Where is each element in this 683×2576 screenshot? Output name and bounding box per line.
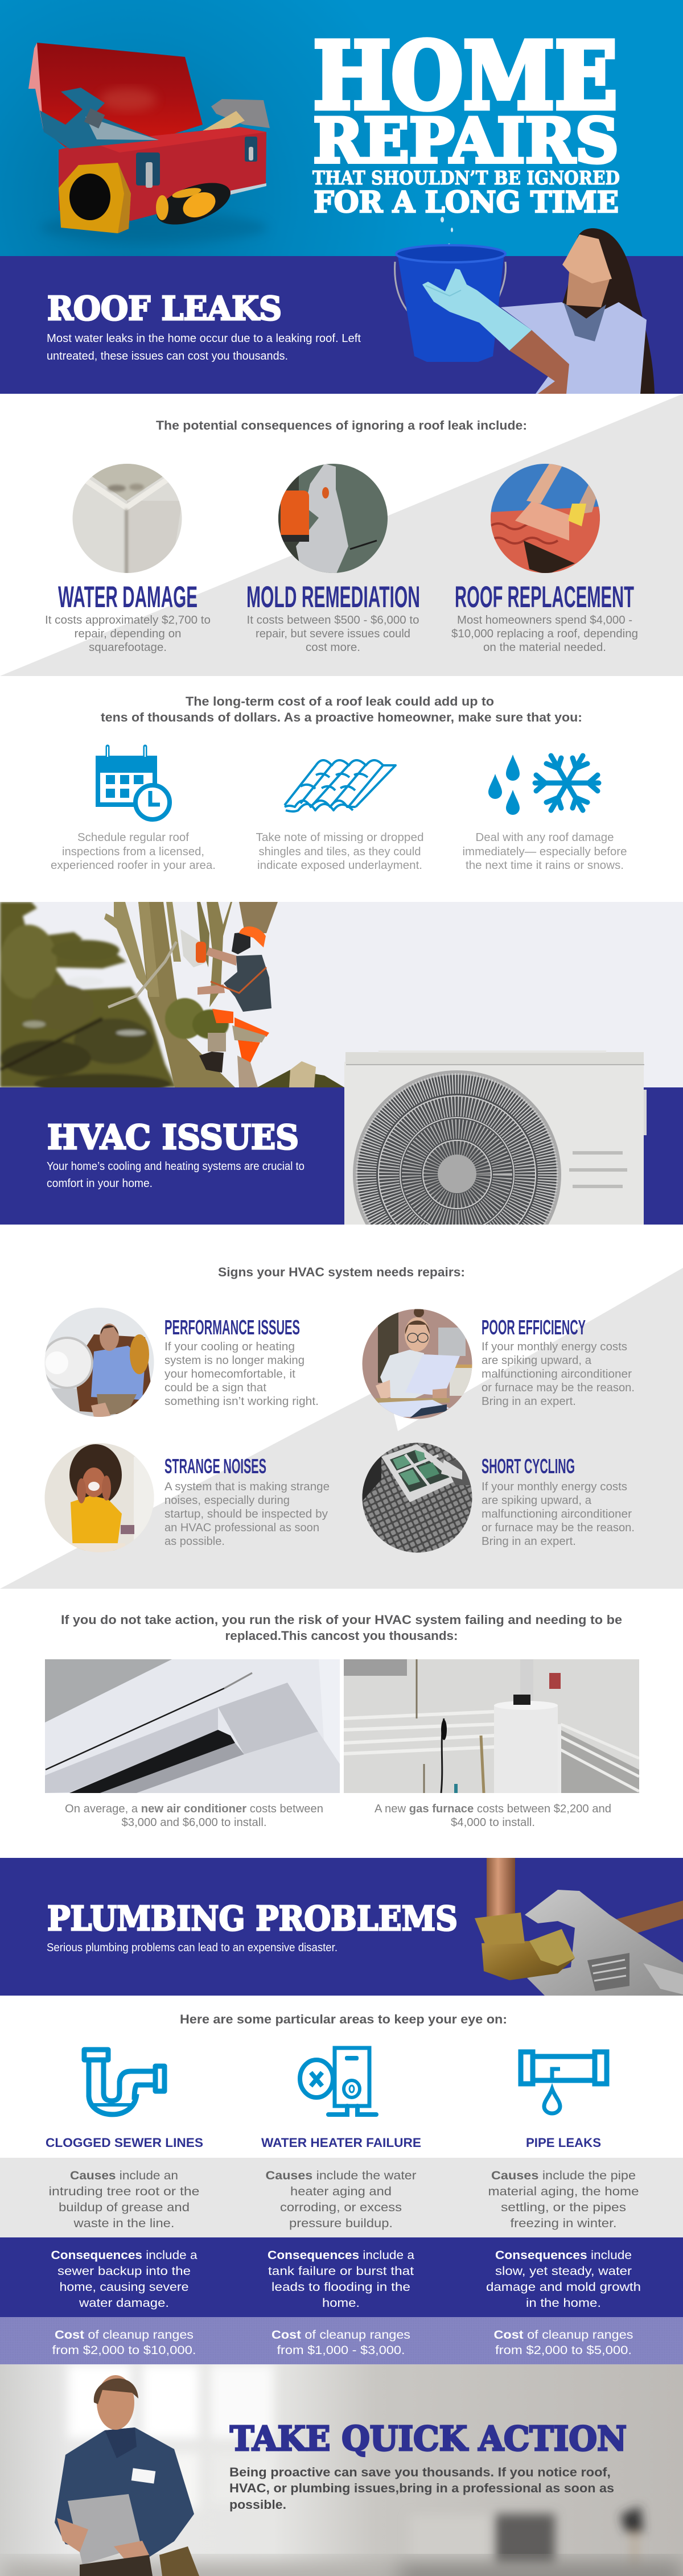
photo: blurred living room with handyman	[0, 2364, 683, 2576]
card: strange noises: noises, especially during	[164, 1494, 290, 1507]
photo: dirty air filter	[361, 1442, 473, 1555]
card: roof replacement	[451, 580, 638, 654]
icon: water heater failure	[300, 2048, 376, 2115]
text: pipe causes: freezing in winter.	[510, 2217, 617, 2230]
panel: proactive tips	[51, 694, 627, 872]
text: pipe consequences: in the home.	[526, 2297, 601, 2310]
text: pipe causes: Causes include the pipe	[491, 2169, 636, 2182]
card: performance issues: PERFORMANCE ISSUES	[164, 1316, 300, 1339]
text: sewer cost: Cost of cleanup ranges	[55, 2328, 194, 2342]
text: roof leaks intro: untreated, these issues can cost you thousands.	[47, 350, 288, 362]
text: heater consequences: leads to flooding in the	[271, 2281, 410, 2294]
text: take quick action body: Being proactive can save you thousands. If you notice roof,	[229, 2465, 611, 2479]
photo: arborist cutting tree	[0, 902, 344, 1094]
card: mold remediation: It costs between $500 - $6,000 to	[247, 614, 419, 627]
card: short cycling: Bring in an expert.	[482, 1535, 576, 1548]
card: strange noises: as possible.	[164, 1535, 225, 1548]
card: roof replacement: Most homeowners spend $4,000 -	[457, 614, 632, 627]
text: pipe causes: settling, or the pipes	[501, 2201, 626, 2214]
card: water damage: WATER DAMAGE	[58, 580, 198, 614]
text: sewer causes: buildup of grease and	[59, 2201, 190, 2214]
text: pipe cost: from $2,000 to $5,000.	[495, 2344, 632, 2357]
text: pipe cost	[494, 2328, 633, 2357]
card: roof replacement: on the material needed.	[483, 641, 606, 654]
card: poor efficiency: are spiking upward, a	[482, 1354, 592, 1367]
icon: rain drops and snowflake	[488, 755, 599, 815]
text: pipe causes	[488, 2169, 639, 2230]
card: performance issues: your homecomfortable, it	[164, 1368, 295, 1380]
label: pipe leaks: PIPE LEAKS	[526, 2136, 601, 2150]
card: short cycling	[482, 1454, 635, 1548]
photo: man sweating with fan	[42, 1308, 155, 1417]
icon: calendar and clock	[96, 747, 170, 819]
heading: take quick action: TAKE QUICK ACTION	[230, 2419, 627, 2458]
heading: long-term cost: tens of thousands of dollars. As a proactive homeowner, make sure that you:	[101, 710, 582, 724]
text: hvac intro: comfort in your home.	[47, 1177, 153, 1190]
card: mold remediation: repair, but severe issues could	[256, 628, 410, 640]
text: hvac intro	[47, 1160, 305, 1190]
heading: hvac issues: HVAC ISSUES	[47, 1118, 299, 1157]
text: heater consequences: tank failure or burst that	[268, 2265, 414, 2278]
heading: signs hvac needs repairs: Signs your HVAC system needs repairs:	[218, 1265, 465, 1279]
text: sewer cost	[52, 2328, 196, 2357]
text: take quick action body	[229, 2465, 614, 2512]
photo: mold remediation worker	[276, 461, 390, 575]
text: heater causes: heater aging and	[290, 2185, 392, 2198]
photo: wall air conditioner	[45, 1659, 340, 1793]
card: short cycling: SHORT CYCLING	[482, 1454, 575, 1478]
text: schedule inspections: Schedule regular roof	[77, 831, 189, 844]
text: roof leaks intro: Most water leaks in the home occur due to a leaking roof. Left	[47, 332, 361, 345]
text: roof leaks intro	[47, 332, 361, 362]
text: note missing shingles: shingles and tiles, as they could	[258, 846, 421, 858]
text: heater cost	[271, 2328, 410, 2357]
photo: water damage ceiling corner	[73, 464, 182, 573]
photo: woman reading bill	[361, 1307, 473, 1420]
card: performance issues: If your cooling or heating	[164, 1341, 295, 1353]
text: take quick action body: possible.	[229, 2497, 286, 2512]
text: pipe consequences: Consequences include	[495, 2249, 632, 2262]
panel: cost row	[0, 2317, 683, 2364]
card: performance issues: something isn’t working right.	[164, 1395, 319, 1408]
text: sewer consequences: water damage.	[79, 2297, 169, 2310]
icon: leaking pipe	[521, 2052, 607, 2113]
card: mold remediation	[246, 580, 420, 654]
heading: long-term cost	[101, 694, 582, 724]
panel: replacement costs	[45, 1613, 639, 1829]
card: mold remediation: MOLD REMEDIATION	[246, 580, 420, 614]
text: heater cost: Cost of cleanup ranges	[271, 2328, 410, 2342]
text: deal with damage	[462, 831, 627, 872]
card: performance issues: system is no longer making	[164, 1354, 305, 1367]
text: heater consequences: Consequences include a	[268, 2249, 414, 2262]
card: performance issues	[164, 1316, 319, 1408]
text: heater consequences: home.	[322, 2297, 360, 2310]
text: heater cost: from $1,000 - $3,000.	[277, 2344, 405, 2357]
card: poor efficiency: POOR EFFICIENCY	[482, 1316, 586, 1339]
text: sewer cost: from $2,000 to $10,000.	[52, 2344, 196, 2357]
text: take quick action body: HVAC, or plumbing issues,bring in a professional as soon as	[229, 2481, 614, 2495]
heading: risk of failing: If you do not take action, you run the risk of your HVAC system failing and needing to be	[61, 1613, 622, 1627]
text: heater causes: Causes include the water	[265, 2169, 417, 2182]
text: deal with damage: Deal with any roof damage	[476, 831, 614, 844]
caption: new gas furnace: A new gas furnace costs between $2,200 and	[375, 1803, 611, 1815]
text: note missing shingles	[256, 831, 423, 872]
photo: woman covering ears	[44, 1443, 157, 1553]
card: poor efficiency: malfunctioning airconditioner	[482, 1368, 632, 1380]
text: heater causes: corroding, or excess	[280, 2201, 402, 2214]
heading: roof leaks: ROOF LEAKS	[47, 290, 282, 328]
heading: plumbing problems: PLUMBING PROBLEMS	[47, 1899, 458, 1938]
text: plumbing intro: Serious plumbing problems can lead to an expensive disaster.	[47, 1942, 338, 1954]
text: sewer consequences: Consequences include a	[51, 2249, 198, 2262]
text: schedule inspections: experienced roofer in your area.	[51, 859, 216, 872]
text: sewer causes: waste in the line.	[73, 2217, 174, 2230]
card: strange noises: an HVAC professional as soon	[164, 1522, 319, 1534]
text: sewer consequences	[51, 2249, 198, 2310]
card: short cycling: If your monthly energy costs	[482, 1481, 627, 1493]
text: heater causes	[265, 2169, 417, 2230]
photo: gas furnace and water heater	[344, 1659, 639, 1793]
card: short cycling: or furnace may be the reason.	[482, 1522, 635, 1534]
card: strange noises: A system that is making strange	[164, 1481, 330, 1493]
panel: consequences row	[0, 2237, 683, 2317]
title: home repairs: HOME	[313, 22, 618, 130]
card: short cycling: are spiking upward, a	[482, 1494, 592, 1507]
panel: roof consequences	[0, 394, 683, 676]
text: pipe consequences: slow, yet steady, water	[495, 2265, 632, 2278]
photo: roof replacement hands and tiles	[491, 464, 600, 573]
diagonal grey background	[0, 394, 683, 676]
text: deal with damage: immediately— especially before	[462, 846, 627, 858]
text: note missing shingles: indicate exposed underlayment.	[257, 859, 422, 872]
card: performance issues: could be a sign that	[164, 1382, 266, 1394]
panel: hvac signs	[0, 1265, 683, 1589]
card: water damage: It costs approximately $2,700 to	[45, 614, 211, 627]
card: strange noises: startup, should be inspected by	[164, 1508, 328, 1520]
text: pipe consequences	[486, 2249, 641, 2310]
panel: roof leaks banner	[0, 217, 683, 394]
card: strange noises	[164, 1454, 330, 1548]
card: poor efficiency: If your monthly energy costs	[482, 1341, 627, 1353]
title: home repairs: REPAIRS	[313, 105, 619, 177]
text: heater consequences	[268, 2249, 414, 2310]
text: sewer consequences: home, causing severe	[59, 2281, 189, 2294]
card: water damage	[45, 580, 211, 654]
panel: causes row	[0, 2158, 683, 2237]
icon: red toolbox with tools	[28, 43, 270, 242]
text: sewer causes: intruding tree root or the	[49, 2185, 199, 2198]
caption: new gas furnace: $4,000 to install.	[451, 1816, 535, 1829]
photo: wrench on copper pipe	[475, 1858, 683, 1996]
icon: clogged drain trap	[84, 2050, 164, 2115]
caption: new air conditioner: $3,000 and $6,000 to install.	[122, 1816, 266, 1829]
card: water damage: repair, depending on	[74, 628, 181, 640]
label: water heater failure: WATER HEATER FAILURE	[261, 2136, 421, 2150]
text: schedule inspections: inspections from a licensed,	[62, 846, 204, 858]
card: poor efficiency: or furnace may be the reason.	[482, 1382, 635, 1394]
title: home repairs: THAT SHOULDN’T BE IGNORED	[312, 167, 620, 189]
text: schedule inspections	[51, 831, 216, 872]
card: strange noises: STRANGE NOISES	[164, 1454, 266, 1478]
text: sewer consequences: sewer backup into the	[57, 2265, 191, 2278]
card: poor efficiency	[482, 1316, 635, 1408]
caption: new air conditioner: On average, a new air conditioner costs between	[65, 1803, 323, 1815]
card: short cycling: malfunctioning airconditioner	[482, 1508, 632, 1520]
card: water damage: squarefootage.	[89, 641, 167, 654]
icon: roof tiles	[285, 760, 396, 811]
text: note missing shingles: Take note of missing or dropped	[256, 831, 423, 844]
panel: take quick action	[0, 2364, 683, 2576]
heading: potential consequences: The potential consequences of ignoring a roof leak include:	[156, 418, 527, 432]
card: poor efficiency: Bring in an expert.	[482, 1395, 576, 1408]
title: home repairs	[312, 22, 620, 220]
heading: risk of failing	[61, 1613, 622, 1643]
panel: plumbing problem areas	[46, 2012, 607, 2150]
caption: new gas furnace	[375, 1803, 611, 1829]
card: roof replacement: $10,000 replacing a roof, depending	[451, 628, 638, 640]
title: home repairs: FOR A LONG TIME	[314, 186, 619, 220]
text: pipe causes: material aging, the home	[488, 2185, 639, 2198]
heading: areas to keep eye on: Here are some particular areas to keep your eye on:	[180, 2012, 507, 2026]
heading: long-term cost: The long-term cost of a roof leak could add up to	[186, 694, 494, 708]
text: hvac intro: Your home’s cooling and heating systems are crucial to	[47, 1160, 305, 1173]
text: sewer causes	[49, 2169, 199, 2230]
icon: woman holding blue bucket catching drips	[395, 217, 655, 394]
panel: hvac banner	[0, 902, 683, 1225]
text: pipe consequences: damage and mold growth	[486, 2281, 641, 2294]
text: sewer causes: Causes include an	[70, 2169, 178, 2182]
text: deal with damage: the next time it rains or snows.	[466, 859, 624, 872]
heading: risk of failing: replaced.This cancost you thousands:	[225, 1629, 458, 1643]
panel: hero header	[0, 0, 683, 256]
diagonal grey background	[0, 1268, 683, 1589]
panel: plumbing banner	[0, 1858, 683, 1996]
photo: outdoor air conditioner unit	[344, 1050, 647, 1225]
label: clogged sewer lines: CLOGGED SEWER LINES	[46, 2136, 203, 2150]
caption: new air conditioner	[65, 1803, 323, 1829]
text: heater causes: pressure buildup.	[289, 2217, 393, 2230]
card: mold remediation: cost more.	[306, 641, 360, 654]
text: pipe cost: Cost of cleanup ranges	[494, 2328, 633, 2342]
